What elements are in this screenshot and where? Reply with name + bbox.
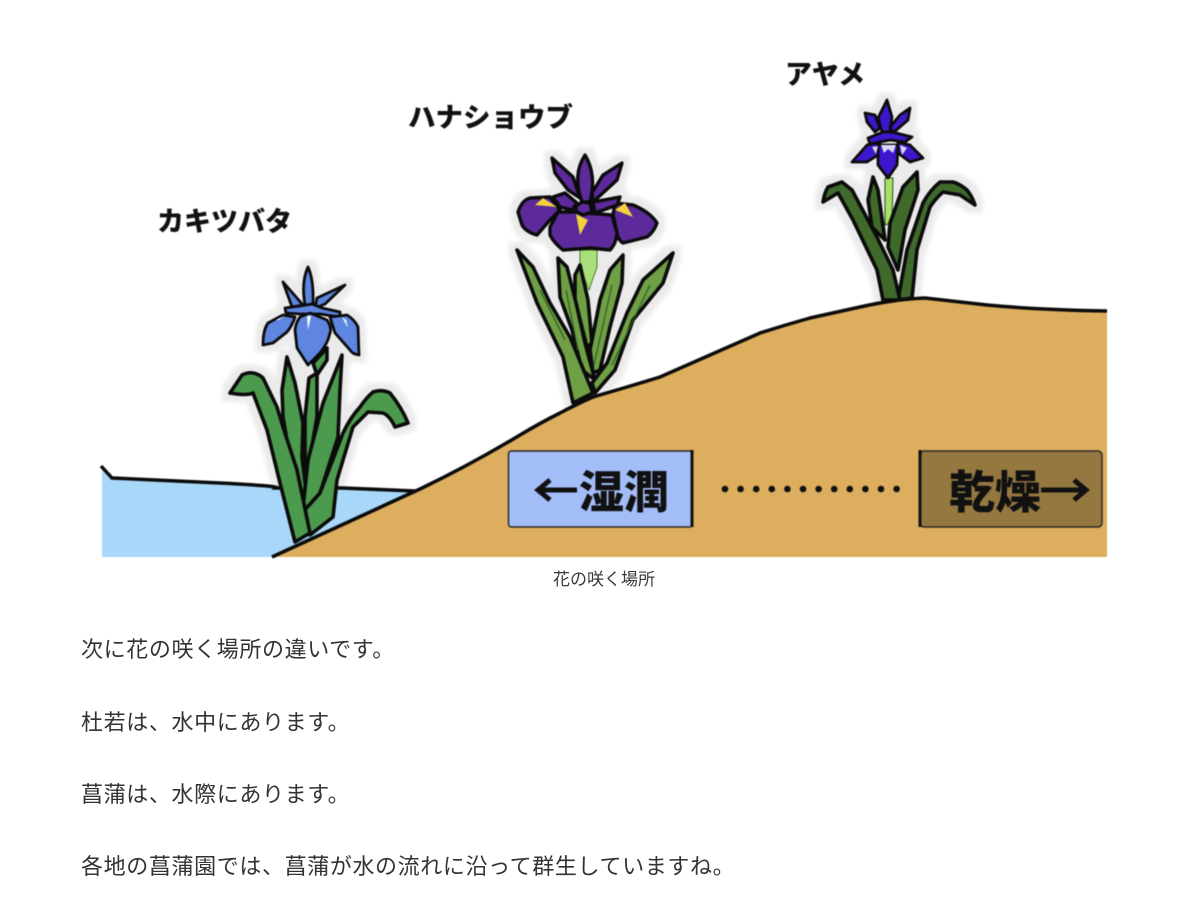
illustration: habitat of irises from wet to dry [99,60,1108,560]
water [101,466,420,557]
leaves [230,348,408,542]
box: wet: 湿潤 [579,467,669,518]
leaves [517,250,673,403]
stem [885,178,893,225]
leaf veins [540,285,650,365]
leaves [823,172,975,300]
white veins [872,145,907,155]
yellow marks [535,198,633,235]
label: カキツバタ: カキツバタ [157,207,292,237]
purple flower [518,155,657,250]
stem [580,250,597,290]
plant: hanashoubu [517,155,673,403]
paragraph 1: 次に花の咲く場所の違いです。 [81,637,395,662]
plant halos [230,100,975,542]
paragraph 4: 各地の菖蒲園では、菖蒲が水の流れに沿って群生していますね。 [81,854,735,879]
highlights [276,316,348,330]
label: アヤメ: アヤメ [785,60,865,90]
paragraph 3: 菖蒲は、水際にあります。 [81,782,350,807]
plant: ayame [823,100,975,300]
paragraph 2: 杜若は、水中にあります。 [81,710,350,735]
blue flower [263,267,359,365]
ground hill [272,298,1107,557]
dotted connector [722,486,900,492]
box: dry [920,450,1102,527]
plant: kakitsubata [230,267,408,542]
box: wet [508,450,692,527]
caption: 花の咲く場所 [553,570,655,589]
violet flower [852,100,923,178]
label: ハナショウブ: ハナショウブ [408,102,573,133]
box: dry: 乾燥 [949,467,1041,518]
